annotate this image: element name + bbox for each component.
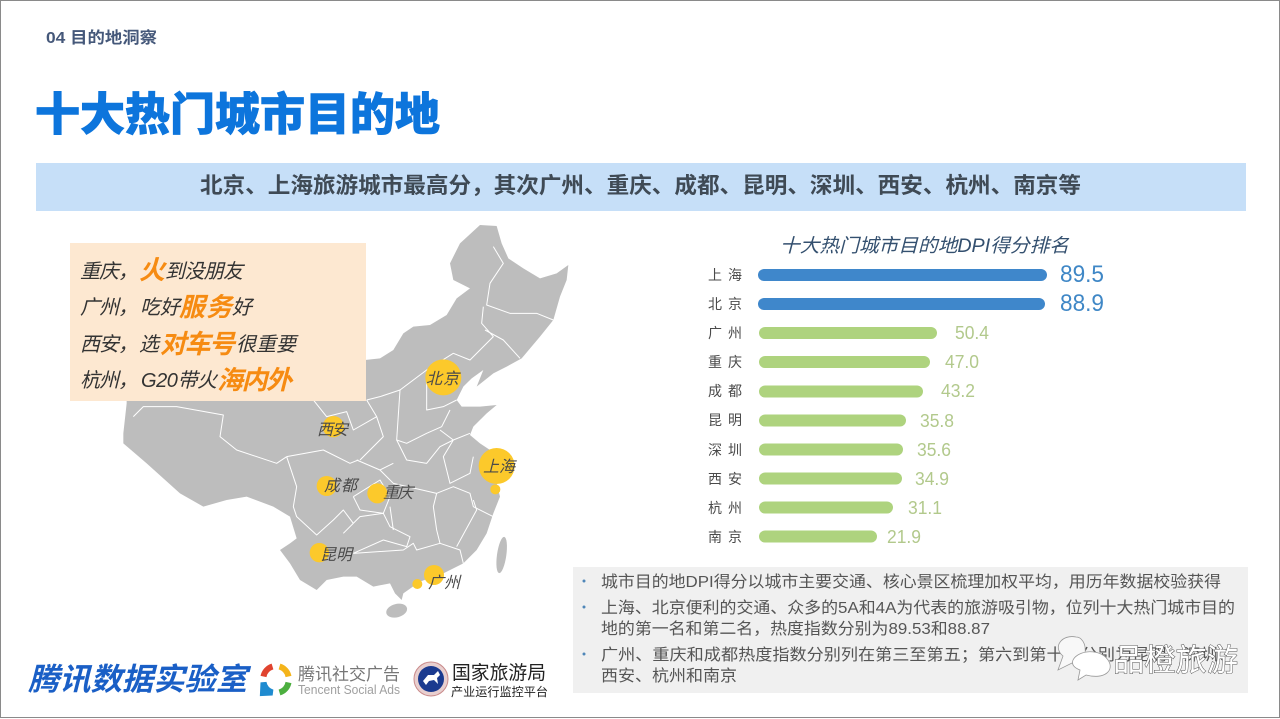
- city labels: 昆 明: [708, 412, 742, 428]
- notes panel: 上海、北京便利的交通、众多的5A和4A为代表的旅游吸引物，位列十大热门城市目的: [601, 599, 1235, 617]
- watermark: text: 品橙旅游: [1113, 643, 1238, 678]
- callout: city slogans: 西安，: [80, 334, 138, 356]
- province borders: [133, 247, 553, 563]
- notes panel: [573, 567, 1248, 693]
- footer logo: Tencent Data Lab: 腾讯数据实验室: [28, 662, 252, 697]
- chart: DPI ranking: 47.0: [945, 352, 979, 372]
- city labels: 深 圳: [708, 442, 742, 458]
- section label: 04 目的地洞察: [46, 28, 157, 47]
- chart: DPI ranking: 50.4: [955, 323, 989, 343]
- city names: [317, 370, 517, 592]
- chart: DPI ranking: 35.8: [920, 411, 954, 431]
- city names: 重庆: [383, 484, 416, 502]
- footer logo: Tencent Social Ads: [263, 665, 400, 697]
- callout: city slogans: 选: [139, 334, 161, 356]
- notes panel: 城市目的地DPI得分以城市主要交通、核心景区梳理加权平均，用历年数据校验获得: [601, 573, 1221, 591]
- city labels: 北 京: [708, 296, 742, 312]
- callout: city slogans: 杭州，: [80, 370, 138, 392]
- callout: city slogans: 到没朋友: [165, 261, 246, 283]
- notes panel: 西安、杭州和南京: [601, 667, 737, 685]
- footer logo: Tencent Social Ads: 腾讯社交广告: [298, 665, 400, 684]
- footer logo: Tencent Social Ads: Tencent Social Ads: [298, 682, 400, 697]
- callout: city slogans: 服务: [179, 292, 235, 322]
- summary banner: [36, 163, 1246, 211]
- emblem: [414, 662, 448, 696]
- mainland silhouette: [123, 225, 568, 600]
- footer logo: National Tourism Administration: 国家旅游局: [452, 662, 546, 684]
- footer logo: National Tourism Administration: 产业运行监控平台: [451, 684, 548, 699]
- city names: 西安: [317, 421, 350, 439]
- summary banner: 北京、上海旅游城市最高分，其次广州、重庆、成都、昆明、深圳、西安、杭州、南京等: [200, 173, 1081, 198]
- city labels: 成 都: [708, 383, 742, 399]
- city bubbles: [310, 359, 515, 589]
- title: 十大热门城市目的地: [35, 89, 440, 140]
- callout: city slogans: 对车号: [160, 329, 237, 359]
- callout: city slogans: [70, 243, 366, 401]
- city labels: 重 庆: [708, 354, 742, 370]
- city names: 昆明: [320, 547, 355, 564]
- city labels: 杭 州: [708, 500, 742, 516]
- chart: DPI ranking: 35.6: [917, 440, 951, 460]
- callout: city slogans: 火: [139, 255, 168, 285]
- Taiwan island: [494, 536, 509, 574]
- callout: city slogans: 好: [232, 297, 255, 319]
- Hainan island: [385, 601, 409, 620]
- chart: DPI ranking: 31.1: [908, 498, 942, 518]
- callout: city slogans: 海内外: [217, 365, 294, 395]
- logo ring: [263, 666, 288, 693]
- callout: city slogans: G20带火: [141, 370, 219, 392]
- city labels: 南 京: [708, 529, 742, 545]
- city names: 广州: [428, 574, 462, 592]
- city labels: 广 州: [708, 325, 742, 341]
- city labels: [708, 267, 742, 545]
- callout: city slogans: 吃好: [140, 297, 183, 319]
- notes panel: 地的第一名和第二名，热度指数分别为89.53和88.87: [601, 620, 990, 638]
- bars: [758, 269, 1047, 542]
- callout: city slogans: 重庆，: [80, 261, 138, 283]
- chart: DPI ranking: [708, 235, 1104, 547]
- chart title: 十大热门城市目的地DPI得分排名: [780, 235, 1070, 257]
- callout: city slogans: 很重要: [236, 334, 299, 356]
- values: [1060, 261, 1104, 317]
- footer logo: National Tourism Administration: [414, 662, 548, 699]
- map of China: [123, 225, 568, 620]
- city labels: 西 安: [708, 471, 742, 487]
- callout: city slogans: 广州，: [80, 297, 138, 319]
- chart: DPI ranking: 21.9: [887, 527, 921, 547]
- city names: 成都: [324, 477, 360, 495]
- notes panel: 广州、重庆和成都热度指数分别列在第三至第五；第六到第十名分别为昆明、深圳、: [601, 646, 1235, 664]
- watermark: WeChat icon: [1058, 637, 1110, 680]
- values: 89.5: [1060, 261, 1104, 288]
- chart: DPI ranking: 34.9: [915, 469, 949, 489]
- city names: 北京: [426, 370, 461, 388]
- city labels: 上 海: [708, 267, 742, 283]
- city names: 上海: [483, 458, 517, 476]
- values: 88.9: [1060, 290, 1104, 317]
- chart: DPI ranking: 43.2: [941, 381, 975, 401]
